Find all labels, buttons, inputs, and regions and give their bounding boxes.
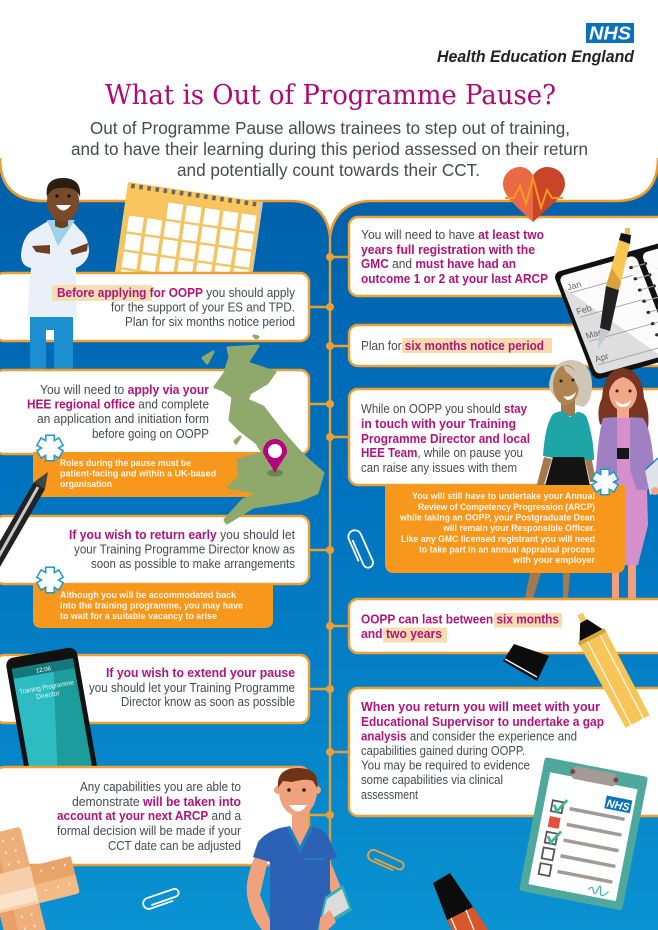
intro text: and to have their learning during this period assessed on their return <box>71 139 588 159</box>
callout: ARCP: while taking an OOPP, your Postgraduate Dean <box>399 512 595 524</box>
icon: nurse clipboard <box>317 885 352 930</box>
text: extend pause: Director know as soon as possible <box>121 694 295 709</box>
icon: clipboard checklist <box>519 757 648 911</box>
icon: notebook and pen: Jan <box>565 279 583 292</box>
icon: calendar <box>115 182 263 272</box>
text: stay in touch: While on OOPP you should stay <box>361 401 528 416</box>
text: capabilities <box>57 779 242 853</box>
intro text: Out of Programme Pause allows trainees to step out of training, <box>90 118 570 138</box>
text: registration: You will need to have at least two <box>361 227 544 242</box>
text: regional office: an application and initiation form <box>37 411 209 426</box>
icon: phone: 12:06 <box>36 666 52 675</box>
icon: paperclip <box>366 848 405 873</box>
callout: accommodated back: to wait for a suitable vacancy to arise <box>60 611 217 622</box>
text: capabilities: Any capabilities you are able to <box>80 779 241 794</box>
icon: clipboard checklist: NHS <box>606 798 631 814</box>
text: stay in touch: in touch with your Training <box>361 416 516 431</box>
callout: ARCP <box>385 485 625 573</box>
text: before applying <box>57 285 296 329</box>
panel: before applying card <box>0 273 309 341</box>
text: on return: You may be required to evidence <box>361 758 530 772</box>
icon: paperclip <box>346 528 375 570</box>
text: extend pause <box>89 665 295 709</box>
text: registration: years full registration with the <box>361 242 535 257</box>
text: on return: When you return you will meet with your <box>361 699 600 714</box>
icon: plaster <box>0 816 90 930</box>
text: on return <box>361 699 604 802</box>
icon: notebook and pen <box>553 222 658 380</box>
callout: roles during the pause: patient-facing and within a UK-based <box>60 468 216 480</box>
panel: registration card <box>349 217 658 296</box>
text: before applying: Plan for six months notice period <box>125 314 295 329</box>
text: capabilities: CCT date can be adjusted <box>108 838 241 853</box>
text: stay in touch: Programme Director and local <box>361 431 530 446</box>
icon: notebook and pen: Feb <box>575 303 593 317</box>
intro text <box>71 118 588 180</box>
icon: pencil <box>0 472 48 567</box>
text: on return: some capabilities via clinical <box>361 772 503 787</box>
text: on return: analysis and consider the experience and <box>361 728 577 744</box>
text: stay in touch: HEE Team, while on pause you <box>361 445 523 460</box>
text: return early: soon as possible to make arrangements <box>91 556 295 571</box>
text: registration: GMC and must have had an <box>361 256 516 271</box>
text: capabilities: demonstrate will be taken into <box>72 794 241 809</box>
panel: on return card <box>349 688 658 816</box>
callout: accommodated back: into the training programme, you may have <box>60 600 243 612</box>
icon: doctor <box>21 178 89 370</box>
logo: NHS Health Education England <box>437 23 635 66</box>
icon: woman in teal <box>525 360 596 598</box>
panel: notice period card <box>349 325 658 366</box>
icon: paperclip <box>142 888 181 910</box>
icon: phone: Director <box>36 690 61 701</box>
text: duration: and two years <box>361 626 442 641</box>
text: extend pause: you should let your Training Programme <box>89 680 295 695</box>
text: on return: assessment <box>361 787 418 802</box>
callout: ARCP: with your employer <box>512 555 595 566</box>
text: stay in touch: can raise any issues with them <box>361 460 517 475</box>
text: stay in touch <box>361 401 530 475</box>
logo: NHS Health Education England: Health Education England <box>437 48 635 66</box>
icon: woman in purple <box>595 368 658 600</box>
text: duration: OOPP can last between six months <box>361 612 559 626</box>
callout: accommodated back: Although you will be accommodated back <box>60 590 237 601</box>
text: regional office <box>27 382 209 441</box>
timeline centre line with connectors <box>309 236 349 890</box>
panel: return early card <box>0 516 309 584</box>
highlight: notice period <box>402 338 552 353</box>
icon: phone <box>5 646 100 797</box>
icon: notebook and pen: Apr <box>593 351 610 364</box>
icon: heart <box>503 167 565 222</box>
icon: marker <box>433 873 495 930</box>
text: duration <box>361 612 559 641</box>
text: return early <box>69 527 295 571</box>
callout: ARCP: You will still have to undertake your Annual <box>412 491 595 502</box>
callout: roles during the pause: Roles during the pause must be <box>60 458 191 469</box>
text: before applying: Before applying for OOPP you should apply <box>57 285 296 300</box>
text: return early: If you wish to return early you should let <box>69 527 295 542</box>
text: regional office: You will need to apply via your <box>40 382 209 397</box>
icon: map pin <box>263 439 287 476</box>
icon: UK map <box>203 336 323 523</box>
highlight: two years <box>383 628 447 642</box>
title: What is Out of Programme Pause? <box>105 80 556 111</box>
text: capabilities: formal decision will be made if your <box>57 823 242 838</box>
icon: highlighter cap <box>503 644 549 681</box>
text: capabilities: account at your next ARCP and a <box>57 808 242 823</box>
text: notice period: Plan for six months notice period <box>361 338 544 353</box>
text: on return: capabilities gained during OOPP. <box>361 743 525 758</box>
panel: capabilities card <box>0 767 309 865</box>
text: regional office: HEE regional office and complete <box>27 396 209 412</box>
icon: asterisk <box>593 468 617 496</box>
text: registration: outcome 1 or 2 at your last ARCP <box>361 271 548 286</box>
text: extend pause: If you wish to extend your pause <box>106 665 295 680</box>
callout: roles during the pause: organisation <box>60 479 112 490</box>
icon: notebook and pen: Mar <box>584 327 603 341</box>
highlight: before applying <box>52 285 152 301</box>
icon: asterisk <box>38 434 62 462</box>
callout: ARCP: to take part in an annual appraisal process <box>419 544 595 556</box>
callout: accommodated back <box>33 584 273 628</box>
text: return early: your Training Programme Director know as <box>74 542 295 556</box>
icon: asterisk <box>38 566 62 594</box>
callout: ARCP: will remain your Responsible Officer. <box>442 523 595 534</box>
panel: regional office <box>0 370 309 454</box>
text: registration <box>361 227 548 286</box>
callout: ARCP: Review of Competency Progression (ARCP) <box>418 502 595 513</box>
highlight: six months <box>494 613 562 628</box>
text: on return: Educational Supervisor to undertake a gap <box>361 714 604 729</box>
panel: duration card <box>349 599 658 653</box>
callout: roles during the pause <box>33 452 270 497</box>
panel: extend pause card <box>0 655 309 723</box>
text: before applying: for the support of your ES and TPD. <box>111 300 295 314</box>
icon: highlighter <box>567 607 650 729</box>
icon: nurse <box>247 766 342 930</box>
panel: stay in touch card <box>349 389 658 485</box>
logo: NHS Health Education England: NHS <box>589 24 631 44</box>
text: regional office: before going on OOPP <box>92 426 209 441</box>
intro text: and potentially count towards their CCT. <box>177 160 480 180</box>
icon: phone: Training Programme <box>19 679 74 696</box>
callout: ARCP: Like any GMC licensed registrant you will need <box>401 534 595 545</box>
